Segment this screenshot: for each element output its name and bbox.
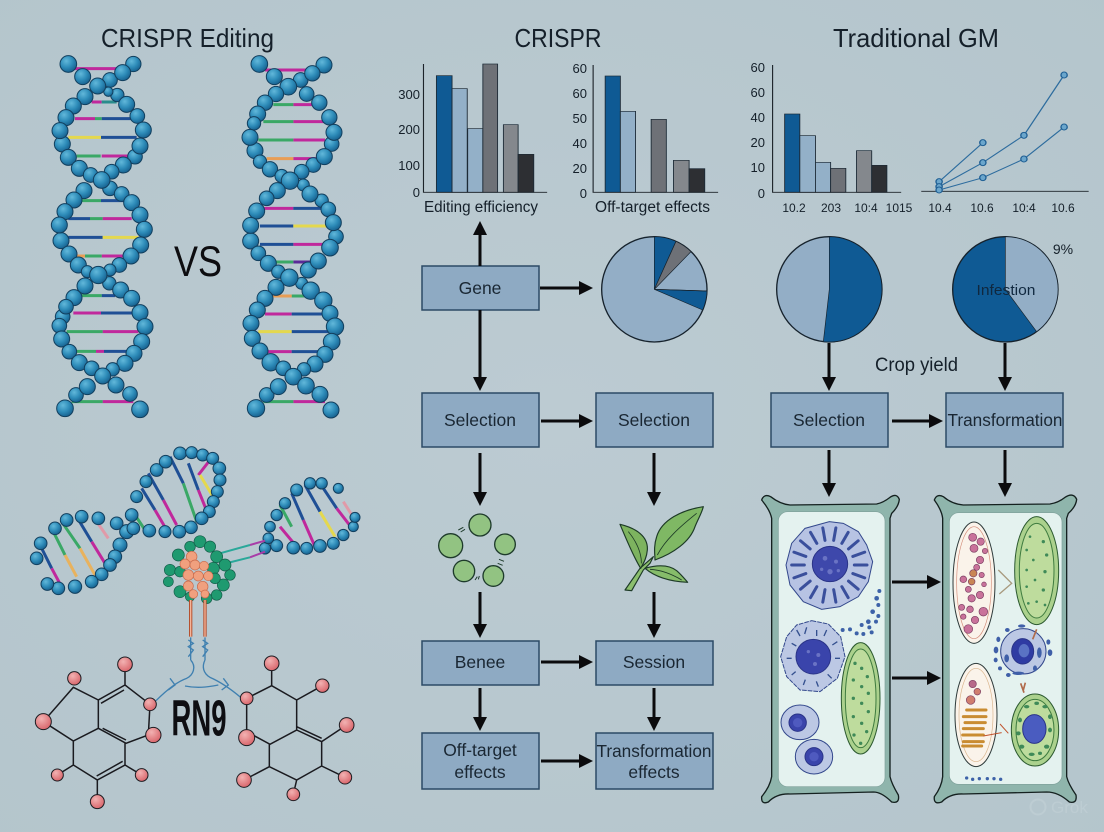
CRISPR-Cas9 complex illustration (30, 447, 360, 809)
bar chart: Editing efficiency: Editing efficiency (424, 199, 538, 216)
arrow: Transformation to cell (998, 450, 1012, 497)
flow box: Off-target effects: effects (454, 762, 506, 782)
plant cell: right (934, 495, 1077, 803)
line chart: Traditional GM: 10.4 (928, 201, 952, 215)
flow box: Selection 2 (596, 393, 713, 447)
flow box: Gene (422, 266, 539, 310)
arrow: Selection to leaf (647, 453, 661, 506)
Cas9 protein (163, 536, 235, 604)
DNA double helix: left (51, 56, 153, 418)
bar chart: Off-target effects: 40 (573, 136, 587, 151)
bar chart: Traditional GM: 203 (821, 201, 841, 215)
arrow: cell to cell lower (892, 671, 941, 685)
label: VS: VS (174, 238, 222, 286)
arrow: Benee to Off-target (473, 688, 487, 731)
bar chart: Off-target effects: 60 (573, 86, 587, 101)
flow box: Selection 3 (771, 393, 888, 447)
arrow: Off-target to Transformation effects (541, 754, 593, 768)
flow box: Off-target effects: Off-target (443, 740, 517, 760)
links from DNA to protein (220, 541, 265, 564)
arrow: cell to cell upper (892, 575, 941, 589)
bar chart: Editing efficiency: 200 (398, 122, 420, 137)
flow box: Selection 3: Selection (793, 410, 865, 430)
bar chart: Traditional GM: 40 (751, 110, 765, 125)
flow box: Selection 1: Selection (444, 410, 516, 430)
flow box: Off-target effects (422, 733, 539, 789)
line chart: Traditional GM: 10.6 (970, 201, 994, 215)
title: Traditional GM: Traditional GM (833, 23, 999, 53)
arrow: Session to Transformation effects (647, 688, 661, 731)
arrow: Benee to Session (541, 655, 593, 669)
bar chart: Editing efficiency: 0 (413, 185, 420, 200)
flow box: Benee: Benee (455, 652, 505, 672)
bar chart: Off-target effects: 50 (573, 111, 587, 126)
bar chart: Off-target effects: 20 (573, 161, 587, 176)
organelle: medium nucleus cell (781, 621, 845, 692)
organelle: chloroplast (841, 643, 880, 754)
arrow: Gene to pie (540, 281, 593, 295)
bar chart: Traditional GM: 20 (751, 135, 765, 150)
line chart: Traditional GM: 10:4 (1012, 201, 1036, 215)
arrow: cells to Benee (473, 592, 487, 638)
label: RN9: RN9 (171, 689, 226, 746)
organelle: small cell 1 (781, 705, 819, 740)
bar chart: Editing efficiency (398, 64, 547, 216)
watermark: Grok (1030, 798, 1088, 817)
bar chart: Editing efficiency: 300 (398, 87, 420, 102)
flow box: Gene: Gene (459, 278, 501, 298)
bar chart: Off-target effects: Off-target effects (595, 199, 710, 216)
twisted DNA strands (30, 447, 360, 595)
arrow: Selection to cells (473, 453, 487, 506)
flow box: Transformation effects: Transformation (596, 741, 712, 761)
pie chart: CRISPR (602, 237, 707, 342)
line chart: Traditional GM (921, 72, 1089, 215)
arrow: Selection to Selection (541, 414, 593, 428)
arrow: leaf to Session (647, 592, 661, 638)
plant cell: left (762, 495, 899, 803)
organelle: bottom dots (965, 776, 1002, 781)
flow box: Selection 1 (422, 393, 539, 447)
organelle: large nucleus cell (786, 522, 873, 609)
chevron mark (998, 570, 1012, 594)
pie chart: Infestion (953, 237, 1058, 342)
organelle: upper chloroplast (1015, 517, 1059, 625)
organelle: vacuole with orange folds (955, 663, 997, 767)
flow box: Session (596, 641, 713, 685)
molecule: right ring structure (237, 656, 354, 801)
arrow: Gene to Selection (473, 310, 487, 391)
icon: green cell ring (439, 514, 515, 586)
arrow: Gene up to chart (473, 221, 487, 266)
pie chart: Traditional GM selection (777, 237, 882, 342)
icon: leaf sprout (620, 507, 703, 591)
organelle: vacuole with granules (953, 522, 995, 643)
organelle: lower chloroplast (1011, 694, 1059, 766)
molecule: left ring structure (35, 657, 161, 809)
label: Infestion: Infestion (976, 282, 1036, 299)
bar chart: Traditional GM (751, 60, 913, 215)
arrow: Selection to Transformation (892, 414, 943, 428)
bar chart: Off-target effects: 0 (580, 186, 587, 201)
bar chart: Traditional GM: 10.2 (782, 201, 806, 215)
flow box: Benee (422, 641, 539, 685)
flow box: Selection 2: Selection (618, 410, 690, 430)
arrow: Selection to cell (822, 450, 836, 497)
bar chart: Traditional GM: 0 (758, 186, 765, 201)
bar chart: Editing efficiency: 100 (398, 158, 420, 173)
label: 9%: 9% (1053, 241, 1073, 257)
arrow: pie to Transformation (998, 343, 1012, 391)
DNA double helix: right (242, 56, 344, 418)
organelle: blue nucleus cell (994, 624, 1052, 693)
red marker (983, 724, 1008, 736)
flow box: Transformation effects (596, 733, 713, 789)
watermark: Grok: Grok (1051, 798, 1088, 817)
organelle: dots trail (841, 589, 881, 636)
flow box: Transformation effects: effects (628, 762, 680, 782)
arrow: pie to Selection (822, 343, 836, 391)
bar chart: Traditional GM: 10 (751, 160, 765, 175)
flow box: Session: Session (623, 652, 685, 672)
RNA stems (156, 600, 241, 701)
label: Crop yield: Crop yield (875, 355, 958, 376)
bar chart: Traditional GM: 1015 (886, 201, 913, 215)
flow box: Transformation (946, 393, 1063, 447)
bar chart: Traditional GM: 60 (751, 60, 765, 75)
flow box: Transformation: Transformation (948, 410, 1062, 430)
bar chart: Traditional GM: 60 (751, 85, 765, 100)
title: CRISPR: CRISPR (514, 23, 602, 53)
bar chart: Traditional GM: 10:4 (854, 201, 878, 215)
bar chart: Off-target effects (573, 61, 718, 216)
organelle: small cell 2 (795, 739, 833, 774)
line chart: Traditional GM: 10.6 (1051, 201, 1075, 215)
bar chart: Off-target effects: 60 (573, 61, 587, 76)
title: CRISPR Editing: CRISPR Editing (101, 23, 274, 53)
